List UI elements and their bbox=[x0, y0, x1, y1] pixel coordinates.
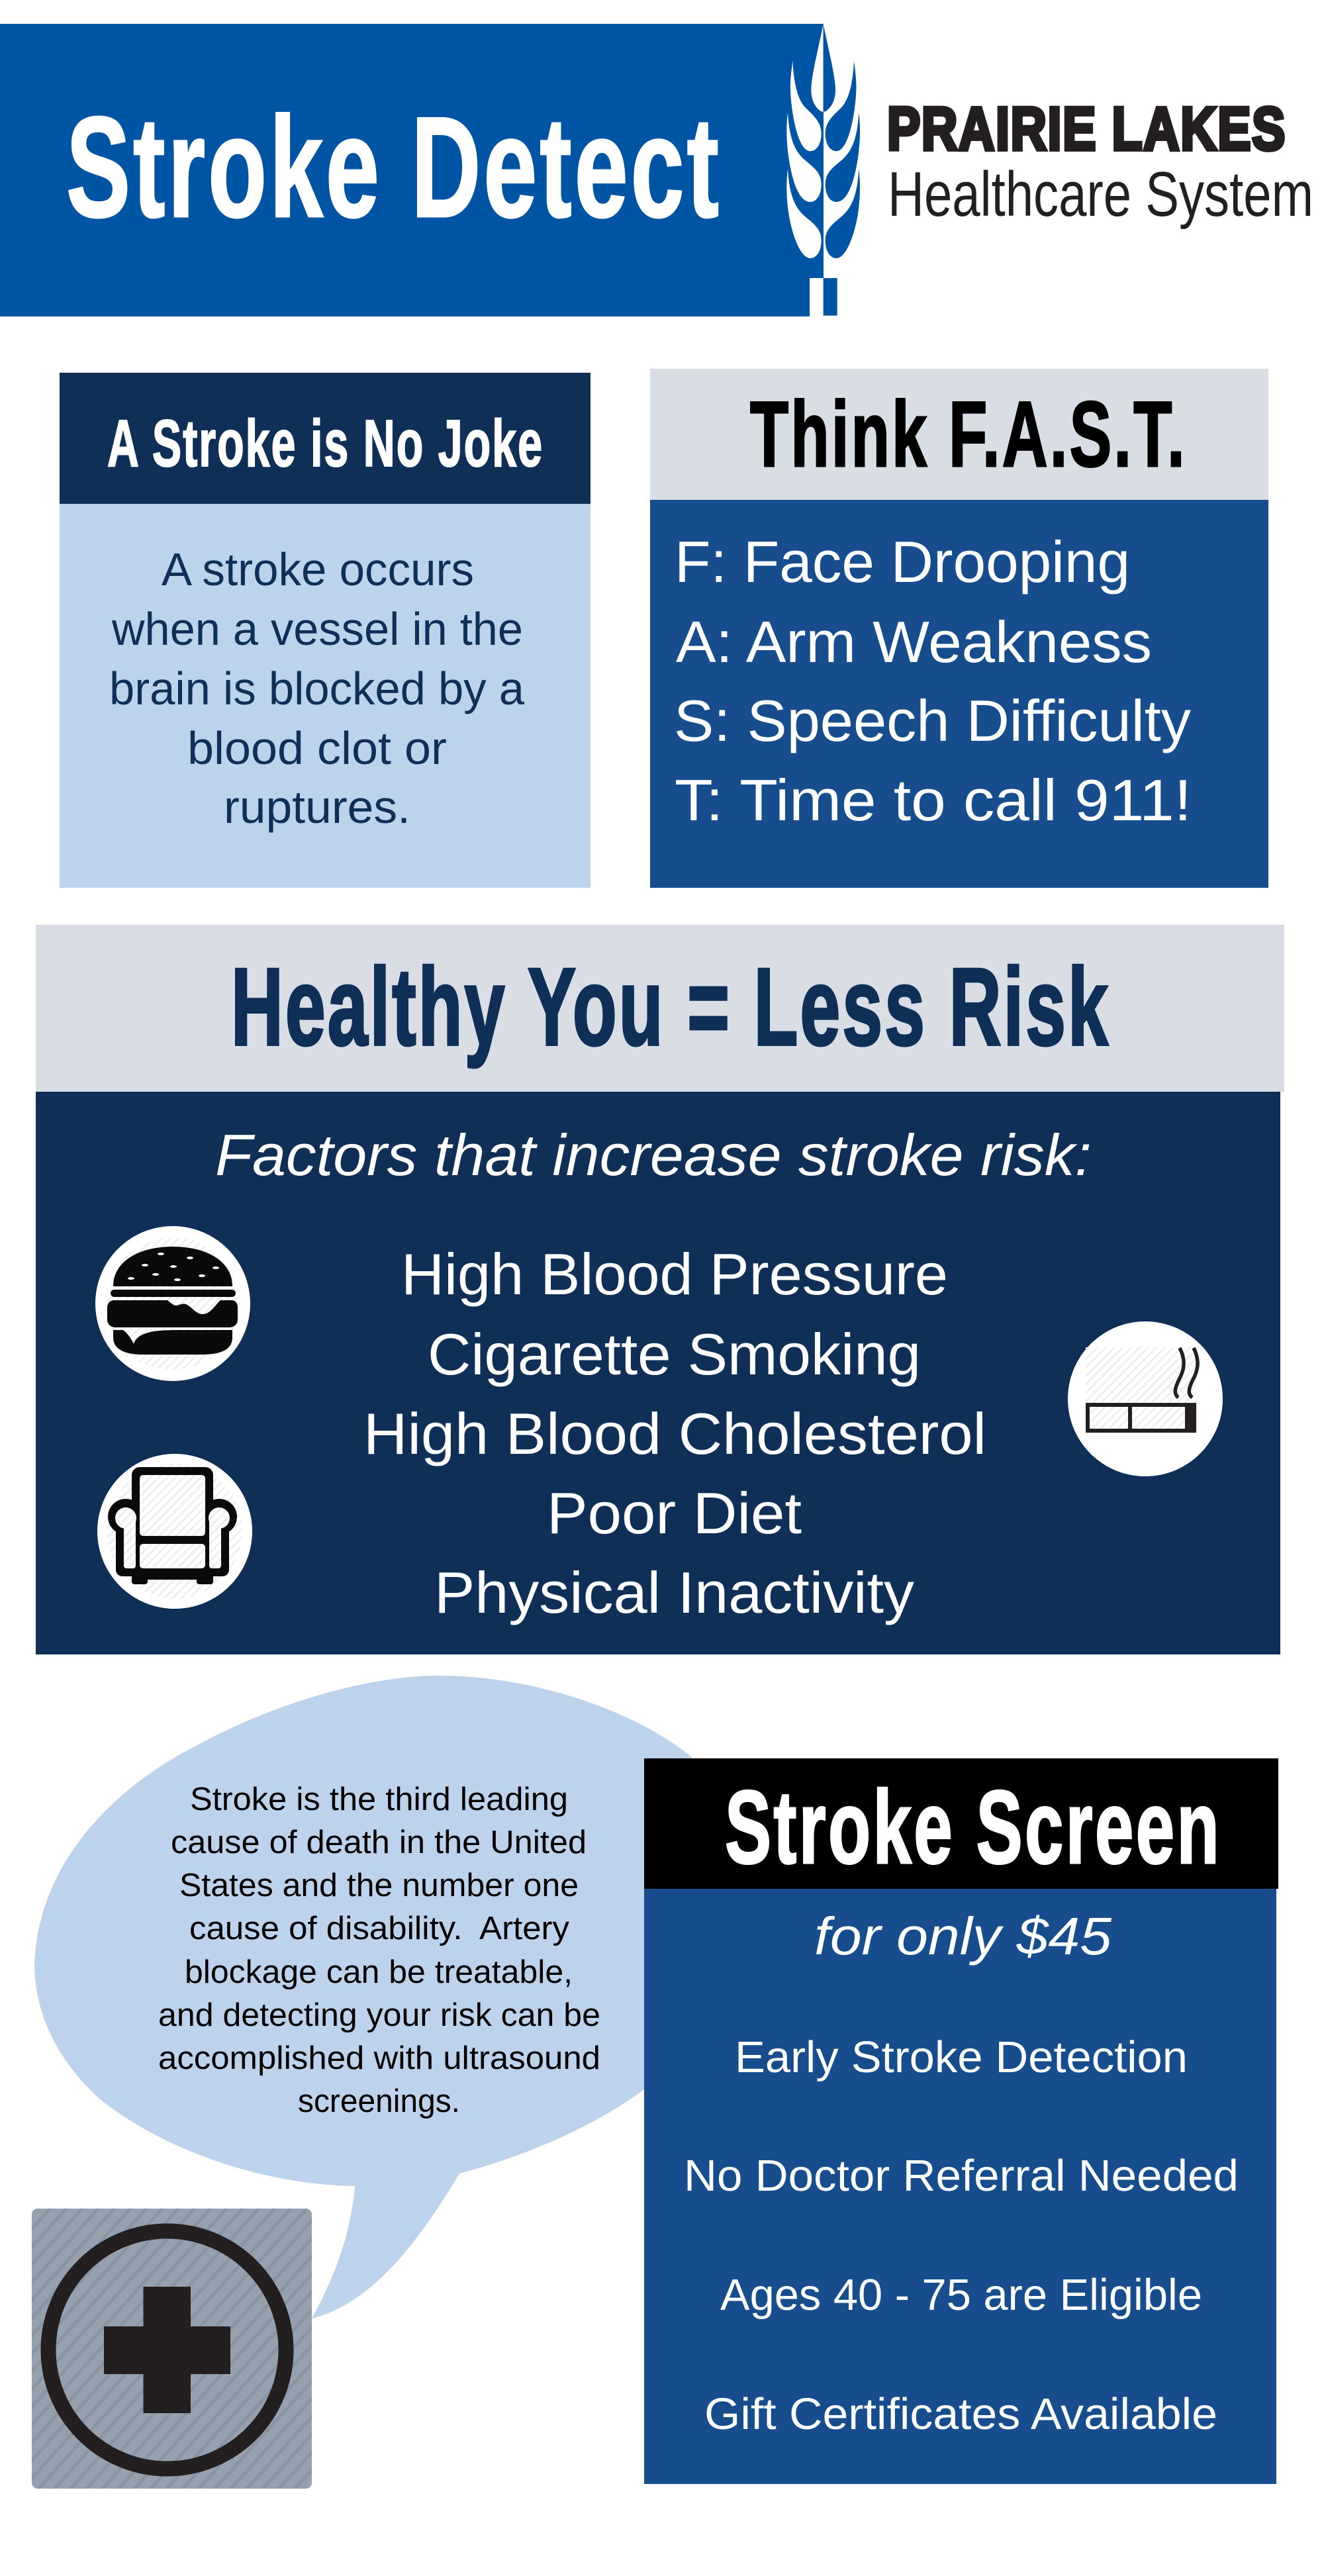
panel: healthy you heading bbox=[36, 925, 1284, 1092]
risk factor list: High Blood Pressure bbox=[401, 1241, 948, 1307]
panel: stroke screen bbox=[644, 1758, 1278, 2484]
body text: A stroke occurs bbox=[162, 544, 474, 595]
logo: wheat mark bbox=[786, 24, 860, 317]
icon: burger bbox=[95, 1226, 250, 1381]
bubble text: Stroke is the third leading bbox=[190, 1782, 568, 1817]
bubble text: cause of death in the United bbox=[171, 1825, 587, 1860]
price: for only $45 bbox=[814, 1907, 1112, 1966]
icon: armchair bbox=[97, 1454, 252, 1609]
risk factor list: High Blood Cholesterol bbox=[363, 1401, 986, 1466]
title: Stroke Detect: Stroke Detect bbox=[66, 87, 722, 247]
icon: cigarette bbox=[1068, 1321, 1223, 1476]
screening benefits: Early Stroke Detection bbox=[735, 2032, 1188, 2082]
panel: risk factors bbox=[36, 1092, 1280, 1654]
screening benefits: No Doctor Referral Needed bbox=[684, 2151, 1239, 2201]
body text: when a vessel in the bbox=[111, 603, 523, 655]
FAST list: F: Face Drooping bbox=[675, 529, 1130, 595]
bubble text: cause of disability. Artery bbox=[189, 1911, 570, 1946]
screening benefits bbox=[684, 2032, 1239, 2439]
icon: medical cross bbox=[32, 2209, 312, 2489]
bubble text: States and the number one bbox=[179, 1868, 579, 1903]
FAST list: T: Time to call 911! bbox=[675, 767, 1192, 833]
bubble text: accomplished with ultrasound bbox=[158, 2040, 600, 2076]
risk factor list: Cigarette Smoking bbox=[428, 1321, 921, 1387]
risk factor list bbox=[363, 1241, 986, 1625]
risk factor list: Poor Diet bbox=[547, 1480, 802, 1546]
heading: A Stroke is No Joke bbox=[107, 406, 544, 481]
screening benefits: Gift Certificates Available bbox=[704, 2389, 1217, 2439]
body text: ruptures. bbox=[224, 781, 410, 833]
bubble text: and detecting your risk can be bbox=[158, 1997, 600, 2033]
bubble text bbox=[158, 1782, 600, 2119]
body text: brain is blocked by a bbox=[109, 663, 524, 714]
panel: a stroke is no joke bbox=[60, 373, 591, 888]
FAST list: S: Speech Difficulty bbox=[674, 688, 1191, 753]
bubble text: blockage can be treatable, bbox=[185, 1954, 573, 1990]
panel: think fast bbox=[650, 369, 1268, 888]
screening benefits: Ages 40 - 75 are Eligible bbox=[720, 2270, 1202, 2320]
body text: blood clot or bbox=[187, 722, 447, 774]
body text bbox=[109, 544, 524, 833]
speech bubble bbox=[34, 1676, 724, 2318]
bubble text: screenings. bbox=[298, 2083, 460, 2119]
subheading: Factors that increase stroke risk: bbox=[215, 1122, 1092, 1188]
title banner bbox=[0, 24, 824, 316]
FAST list: A: Arm Weakness bbox=[676, 609, 1152, 675]
FAST list bbox=[674, 529, 1192, 833]
risk factor list: Physical Inactivity bbox=[434, 1560, 914, 1625]
